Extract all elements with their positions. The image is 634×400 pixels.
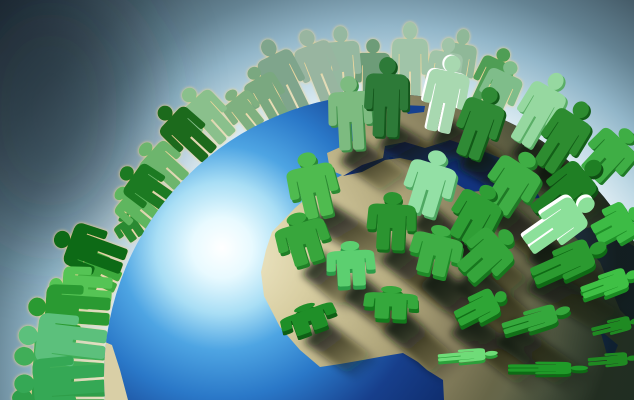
person: back row [326, 50, 634, 193]
rim people: figures along the globe horizon [12, 22, 531, 400]
land mass: Africa, Europe and Asia [261, 90, 634, 400]
globe: ocean sphere [104, 94, 634, 400]
cast shadows [312, 130, 625, 388]
sea: Indian Ocean patch [574, 227, 634, 320]
sea: northern waters [407, 105, 425, 114]
land: west Africa coast sliver on the far left [104, 342, 128, 400]
globe: land and seas [104, 95, 634, 400]
sea: Mediterranean [343, 140, 540, 200]
person: second row [286, 150, 634, 254]
dark haze in the upper left of the sky [0, 0, 145, 240]
person: middle row [269, 191, 614, 296]
globe edge vignette [500, 120, 634, 400]
person: flattened front row [276, 262, 634, 377]
foreground people standing on the globe [269, 50, 634, 377]
sea: eastern waters [601, 334, 618, 356]
